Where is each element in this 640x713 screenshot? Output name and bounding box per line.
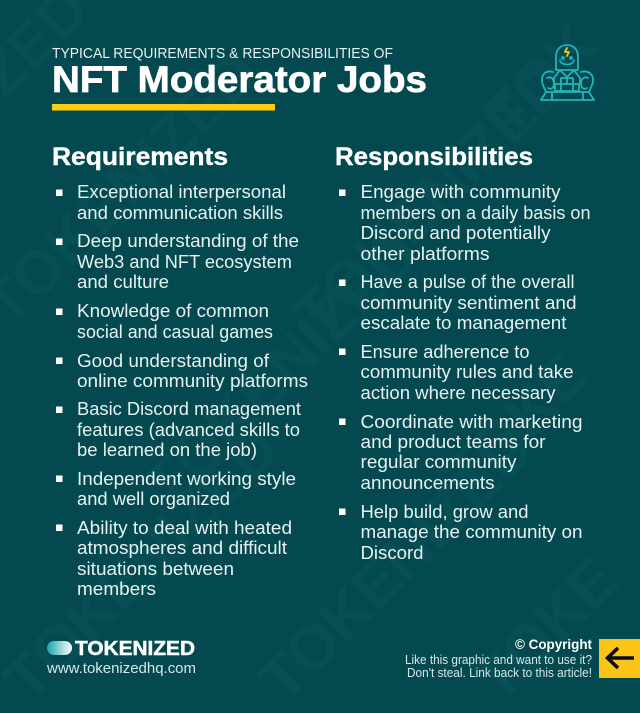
- responsibility 3: [339, 342, 574, 403]
- requirement 4: online community platforms: [77, 371, 308, 391]
- responsibility 1: [339, 182, 590, 264]
- requirement 2: [56, 231, 299, 292]
- requirement 7: [56, 518, 292, 599]
- heading: requirements: Requirements: [52, 143, 228, 171]
- text: TOK: [471, 9, 612, 150]
- list: responsibilities: [339, 182, 590, 563]
- requirement 1: and communication skills: [77, 203, 283, 223]
- arrow button: [599, 639, 640, 678]
- responsibility 4: [339, 412, 582, 493]
- requirement 7: situations between: [77, 559, 234, 579]
- title underline: [52, 104, 275, 110]
- responsibility 3: community rules and take: [360, 362, 574, 382]
- responsibility 2: community sentiment and: [360, 293, 576, 313]
- text: TOKE: [461, 545, 631, 713]
- requirement 3: Knowledge of common: [77, 301, 269, 321]
- responsibility 2: [339, 272, 576, 333]
- heading: responsibilities: Responsibilities: [335, 143, 533, 171]
- requirement 5: Basic Discord management: [77, 399, 301, 419]
- responsibility 5: Discord: [360, 543, 424, 563]
- requirement 2: and culture: [77, 272, 169, 292]
- responsibility 1: members on a daily basis on: [360, 203, 590, 223]
- requirement 7: members: [77, 579, 156, 599]
- copyright note: Don't steal. Link back to this article!: [407, 666, 592, 680]
- responsibility 3: action where necessary: [360, 383, 556, 403]
- requirement 6: [56, 469, 296, 509]
- responsibility 2: Have a pulse of the overall: [360, 272, 574, 292]
- list: requirements: [56, 182, 308, 599]
- logo: tokenized: TOKENIZED: [75, 638, 195, 660]
- copyright note: © Copyright: [515, 636, 592, 652]
- copyright note: [405, 636, 592, 680]
- requirement 7: Ability to deal with heated: [77, 518, 292, 538]
- requirement 7: atmospheres and difficult: [77, 538, 287, 558]
- requirement 5: features (advanced skills to: [77, 420, 300, 440]
- requirement 6: and well organized: [77, 489, 230, 509]
- requirement 3: [56, 301, 273, 342]
- icon: robot moderator with community: [541, 45, 594, 100]
- responsibility 4: announcements: [360, 473, 494, 493]
- responsibility 1: other platforms: [360, 244, 490, 264]
- requirement 5: be learned on the job): [77, 440, 257, 460]
- responsibility 1: Discord and potentially: [360, 223, 550, 243]
- requirement 2: Deep understanding of the: [77, 231, 299, 251]
- text: TOKENIZED: [246, 414, 547, 713]
- requirement 6: Independent working style: [77, 469, 296, 489]
- subtitle: TYPICAL REQUIREMENTS & RESPONSIBILITIES OF: [52, 45, 393, 62]
- responsibility 4: regular community: [360, 452, 516, 472]
- responsibility 5: [339, 502, 582, 563]
- requirement 2: Web3 and NFT ecosystem: [77, 252, 292, 272]
- responsibility 1: Engage with community: [360, 182, 560, 202]
- copyright note: Like this graphic and want to use it?: [405, 653, 592, 667]
- requirement 4: Good understanding of: [77, 351, 270, 371]
- responsibility 3: Ensure adherence to: [360, 342, 530, 362]
- text: TOKE: [431, 340, 601, 510]
- website url: www.tokenizedhq.com: [46, 660, 196, 677]
- responsibility 5: manage the community on: [360, 522, 582, 542]
- responsibility 4: and product teams for: [360, 432, 546, 452]
- requirement 1: [56, 182, 286, 223]
- requirement 4: [56, 351, 308, 391]
- requirement 5: [56, 399, 301, 460]
- responsibility 4: Coordinate with marketing: [360, 412, 582, 432]
- title: NFT Moderator Jobs: [52, 59, 427, 100]
- responsibility 2: escalate to management: [360, 313, 566, 333]
- requirement 3: social and casual games: [77, 322, 273, 342]
- requirement 1: Exceptional interpersonal: [77, 182, 286, 202]
- text: TOKENIZED: [281, 49, 582, 350]
- text: TOKENIZED: [131, 219, 432, 520]
- responsibility 5: Help build, grow and: [360, 502, 528, 522]
